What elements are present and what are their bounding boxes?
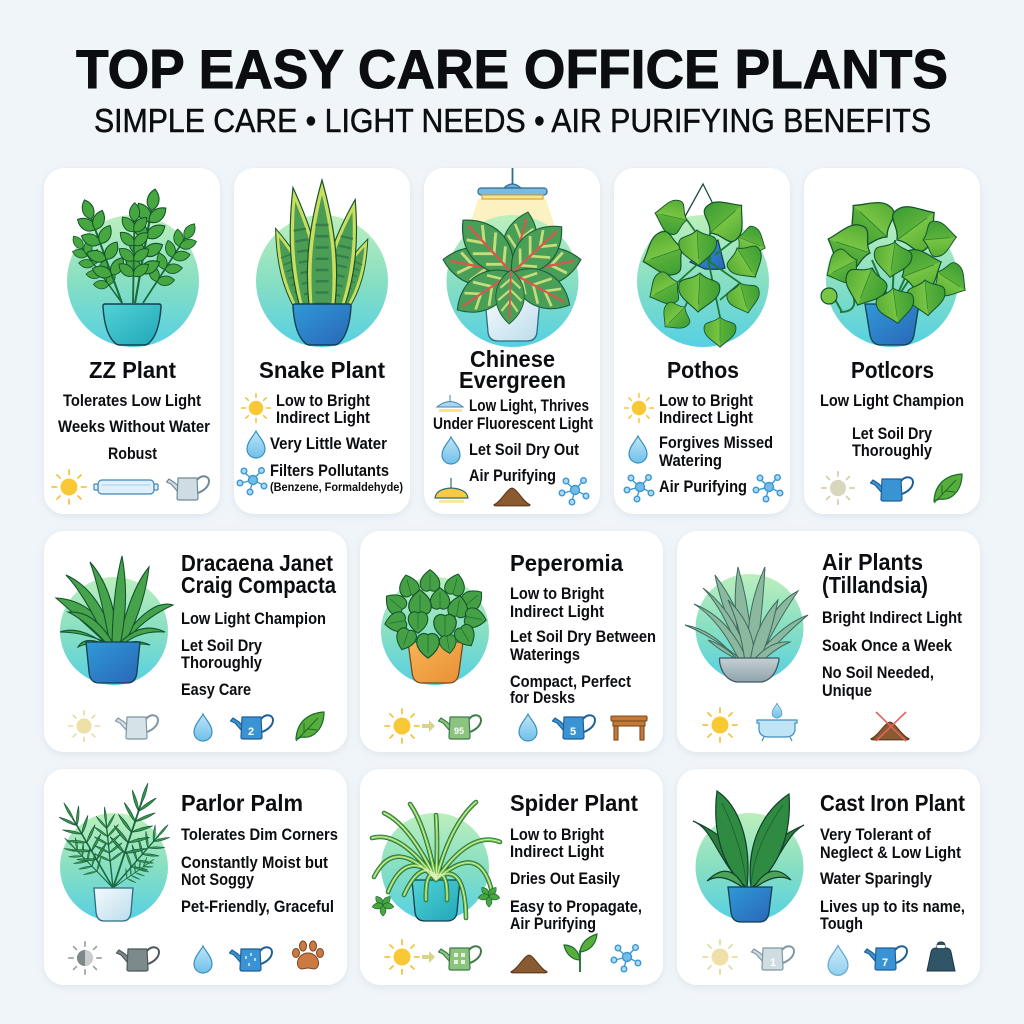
care notes: for Desks (510, 688, 575, 707)
icon: soil mound (494, 488, 530, 506)
heading (459, 346, 566, 393)
card background (360, 531, 663, 752)
care notes: Tough (820, 914, 863, 933)
care notes (58, 391, 210, 463)
care notes: Not Soggy (181, 870, 254, 889)
panel: Parlor Palm (44, 769, 347, 985)
light note: Under Fluorescent Light (433, 414, 593, 433)
care notes: No Soil Needed, (822, 663, 934, 682)
care notes: Thoroughly (852, 441, 932, 460)
icon: sun (703, 708, 737, 742)
icon: molecule (753, 475, 783, 502)
care notes: Water Sparingly (820, 869, 932, 888)
icon: sun (625, 394, 653, 422)
care notes: Low to Bright (510, 825, 604, 844)
icon: water drop (828, 946, 848, 975)
heading: Cast Iron Plant (820, 790, 965, 816)
icon: molecule (624, 475, 654, 502)
heading: Pothos (667, 357, 739, 383)
plant backdrop circle (256, 215, 388, 347)
illustration: Chinese evergreen (440, 207, 584, 341)
air note: Air Purifying (469, 466, 556, 485)
plant backdrop circle (637, 215, 769, 347)
panel: Air Plants (677, 531, 980, 752)
water note: Watering (659, 451, 722, 470)
icon: pale sun (703, 940, 737, 974)
icon: green watering can (438, 715, 481, 739)
icon: blue watering can with number (230, 715, 273, 739)
heading: Dracaena Janet (181, 550, 333, 576)
card background (44, 168, 220, 514)
icon: grey watering can (116, 947, 159, 971)
icon: blue watering can with number (864, 946, 907, 970)
illustration: air plant (685, 567, 808, 682)
care notes: Waterings (510, 645, 580, 664)
illustration: cast iron plant (693, 791, 804, 922)
care notes (181, 609, 326, 699)
icon: water drop (247, 431, 265, 458)
light note: Low to Bright (276, 391, 370, 410)
illustration: peperomia (380, 570, 488, 683)
panel: Pothos (614, 168, 790, 514)
card background (234, 168, 410, 514)
icon: sun (52, 470, 86, 504)
heading: Parlor Palm (181, 790, 303, 816)
light note: Low Light, Thrives (469, 396, 589, 415)
care notes: Easy Care (181, 680, 251, 699)
care notes: Constantly Moist but (181, 853, 328, 872)
illustration: ZZ plant (62, 186, 209, 345)
icon: blue watering can with number (552, 715, 595, 739)
care notes (510, 584, 656, 707)
illustration: potted pothos (819, 188, 975, 345)
icon: small lamp (437, 395, 463, 412)
care notes (820, 391, 964, 460)
panel: Spider Plant (360, 769, 663, 985)
heading: Snake Plant (259, 357, 385, 383)
care notes: Air Purifying (510, 914, 596, 933)
plant backdrop circle (60, 577, 168, 685)
light note: Indirect Light (659, 408, 753, 427)
icon: water drop (519, 714, 537, 741)
illustration: snake plant (264, 180, 379, 345)
icon: green watering can: 95 (454, 726, 464, 736)
plant backdrop circle (381, 577, 489, 685)
icon: blue watering can with number: 7 (882, 957, 888, 969)
illustration: dracaena (56, 556, 173, 683)
plant backdrop circle (67, 215, 199, 347)
heading (181, 550, 337, 598)
care notes: Easy to Propagate, (510, 897, 642, 916)
heading (822, 549, 928, 598)
icon: molecule (237, 468, 267, 495)
card background (44, 531, 347, 752)
heading: Air Plants (822, 549, 923, 575)
plant backdrop circle (696, 813, 804, 921)
icon: paw (292, 941, 324, 969)
plant backdrop circle (446, 215, 578, 347)
heading: Chinese (470, 346, 555, 372)
icon: half sun (69, 942, 101, 974)
care notes: Low Light Champion (181, 609, 326, 628)
icon: dim sun (822, 472, 854, 504)
care notes: Low to Bright (510, 584, 604, 603)
care notes: Dries Out Easily (510, 869, 620, 888)
heading: Evergreen (459, 367, 566, 393)
water note: Very Little Water (270, 434, 387, 453)
icon: blue watering can (230, 947, 272, 971)
plant backdrop circle (826, 215, 958, 347)
illustration: spider plant (372, 802, 500, 921)
light note (659, 391, 753, 427)
icon: sprout (564, 934, 597, 972)
illustration: ceiling lamp (478, 168, 547, 199)
icon: sun (385, 709, 419, 743)
care notes (822, 608, 962, 700)
plant backdrop circle (381, 813, 489, 921)
panel: Snake Plant (234, 168, 410, 514)
care notes: Tolerates Dim Corners (181, 825, 338, 844)
icon: desk (611, 716, 647, 740)
light note (276, 391, 370, 427)
illustration: parlor palm (49, 777, 179, 921)
air note (270, 461, 403, 494)
card background (677, 531, 980, 752)
panel: Cast Iron Plant (677, 769, 980, 985)
care notes: Soak Once a Week (822, 636, 952, 655)
plant backdrop circle (696, 574, 804, 682)
icon: watering can (166, 476, 209, 500)
icon: iron weight (927, 942, 955, 971)
heading: (Tillandsia) (822, 572, 928, 598)
panel: Potlcors (804, 168, 980, 514)
care notes: Very Tolerant of (820, 825, 931, 844)
care notes: Unique (822, 681, 872, 700)
care notes: Compact, Perfect (510, 672, 631, 691)
icon: blue watering can with number: 5 (570, 726, 576, 738)
icon: blue watering can with number: 2 (248, 726, 254, 738)
light beam (458, 199, 566, 262)
care notes: Indirect Light (510, 842, 604, 861)
care notes: Thoroughly (181, 653, 262, 672)
heading: Craig Compacta (181, 572, 337, 598)
heading: Peperomia (510, 550, 624, 576)
icon: molecule (611, 945, 641, 972)
care notes: Weeks Without Water (58, 417, 210, 436)
icon: green watering can (438, 946, 481, 970)
care notes: Low Light Champion (820, 391, 964, 410)
icon: sun (242, 394, 270, 422)
care notes: Indirect Light (510, 602, 604, 621)
panel: Chinese Evergreen (424, 168, 600, 514)
air note: Air Purifying (659, 477, 747, 496)
illustration: hanging pothos (636, 184, 771, 347)
icon: arrow (422, 951, 435, 963)
icon: hanging lamp (435, 478, 468, 503)
water note (659, 433, 773, 470)
care notes: Tolerates Low Light (63, 391, 201, 410)
icon: water drop (629, 436, 647, 463)
card background (44, 769, 347, 985)
panel: Dracaena Janet Craig Compacta (44, 531, 347, 752)
plant backdrop circle (60, 813, 168, 921)
heading: ZZ Plant (89, 357, 176, 383)
icon: soak bath (757, 703, 797, 741)
care notes (510, 825, 642, 933)
icon: water drop (194, 946, 212, 973)
care notes: Pet-Friendly, Graceful (181, 897, 334, 916)
care notes (820, 825, 965, 933)
care notes: Neglect & Low Light (820, 843, 961, 862)
care notes: Let Soil Dry (181, 636, 262, 655)
icon: leaf (296, 712, 324, 741)
icon: arrow (422, 720, 435, 732)
icon: no soil (871, 712, 909, 741)
icon: leaf (934, 474, 962, 503)
card background (424, 168, 600, 514)
water note: Forgives Missed (659, 433, 773, 452)
icon: molecule (559, 478, 589, 505)
care notes: Robust (108, 444, 157, 463)
panel: Peperomia (360, 531, 663, 752)
icon: water drop (194, 714, 212, 741)
air note: (Benzene, Formaldehyde) (270, 480, 403, 494)
heading: Potlcors (851, 357, 934, 383)
icon: soil drop (442, 437, 460, 464)
card background (804, 168, 980, 514)
care notes: Let Soil Dry (852, 424, 932, 443)
card background (677, 769, 980, 985)
icon: fluorescent tube (94, 480, 158, 494)
heading: Spider Plant (510, 790, 638, 816)
icon: blue watering can (870, 477, 913, 501)
care notes (181, 825, 338, 916)
icon: soil mound (511, 955, 547, 973)
care notes: Bright Indirect Light (822, 608, 962, 627)
icon: pale sun (69, 711, 99, 741)
light note (433, 396, 593, 433)
water note: Let Soil Dry Out (469, 440, 579, 459)
care notes: Let Soil Dry Between (510, 627, 656, 646)
card background (614, 168, 790, 514)
light note: Indirect Light (276, 408, 370, 427)
title: TOP EASY CARE OFFICE PLANTS (76, 38, 948, 100)
icon: grey watering can (116, 715, 158, 739)
panel: ZZ Plant (44, 168, 220, 514)
subtitle: SIMPLE CARE • LIGHT NEEDS • AIR PURIFYING BENEFITS (94, 102, 931, 139)
icon: pale watering can with number: 1 (770, 957, 776, 969)
card background (360, 769, 663, 985)
air note: Filters Pollutants (270, 461, 389, 480)
icon: pale watering can with number (752, 946, 794, 970)
icon: sun (385, 940, 419, 974)
care notes: Lives up to its name, (820, 897, 965, 916)
light note: Low to Bright (659, 391, 753, 410)
